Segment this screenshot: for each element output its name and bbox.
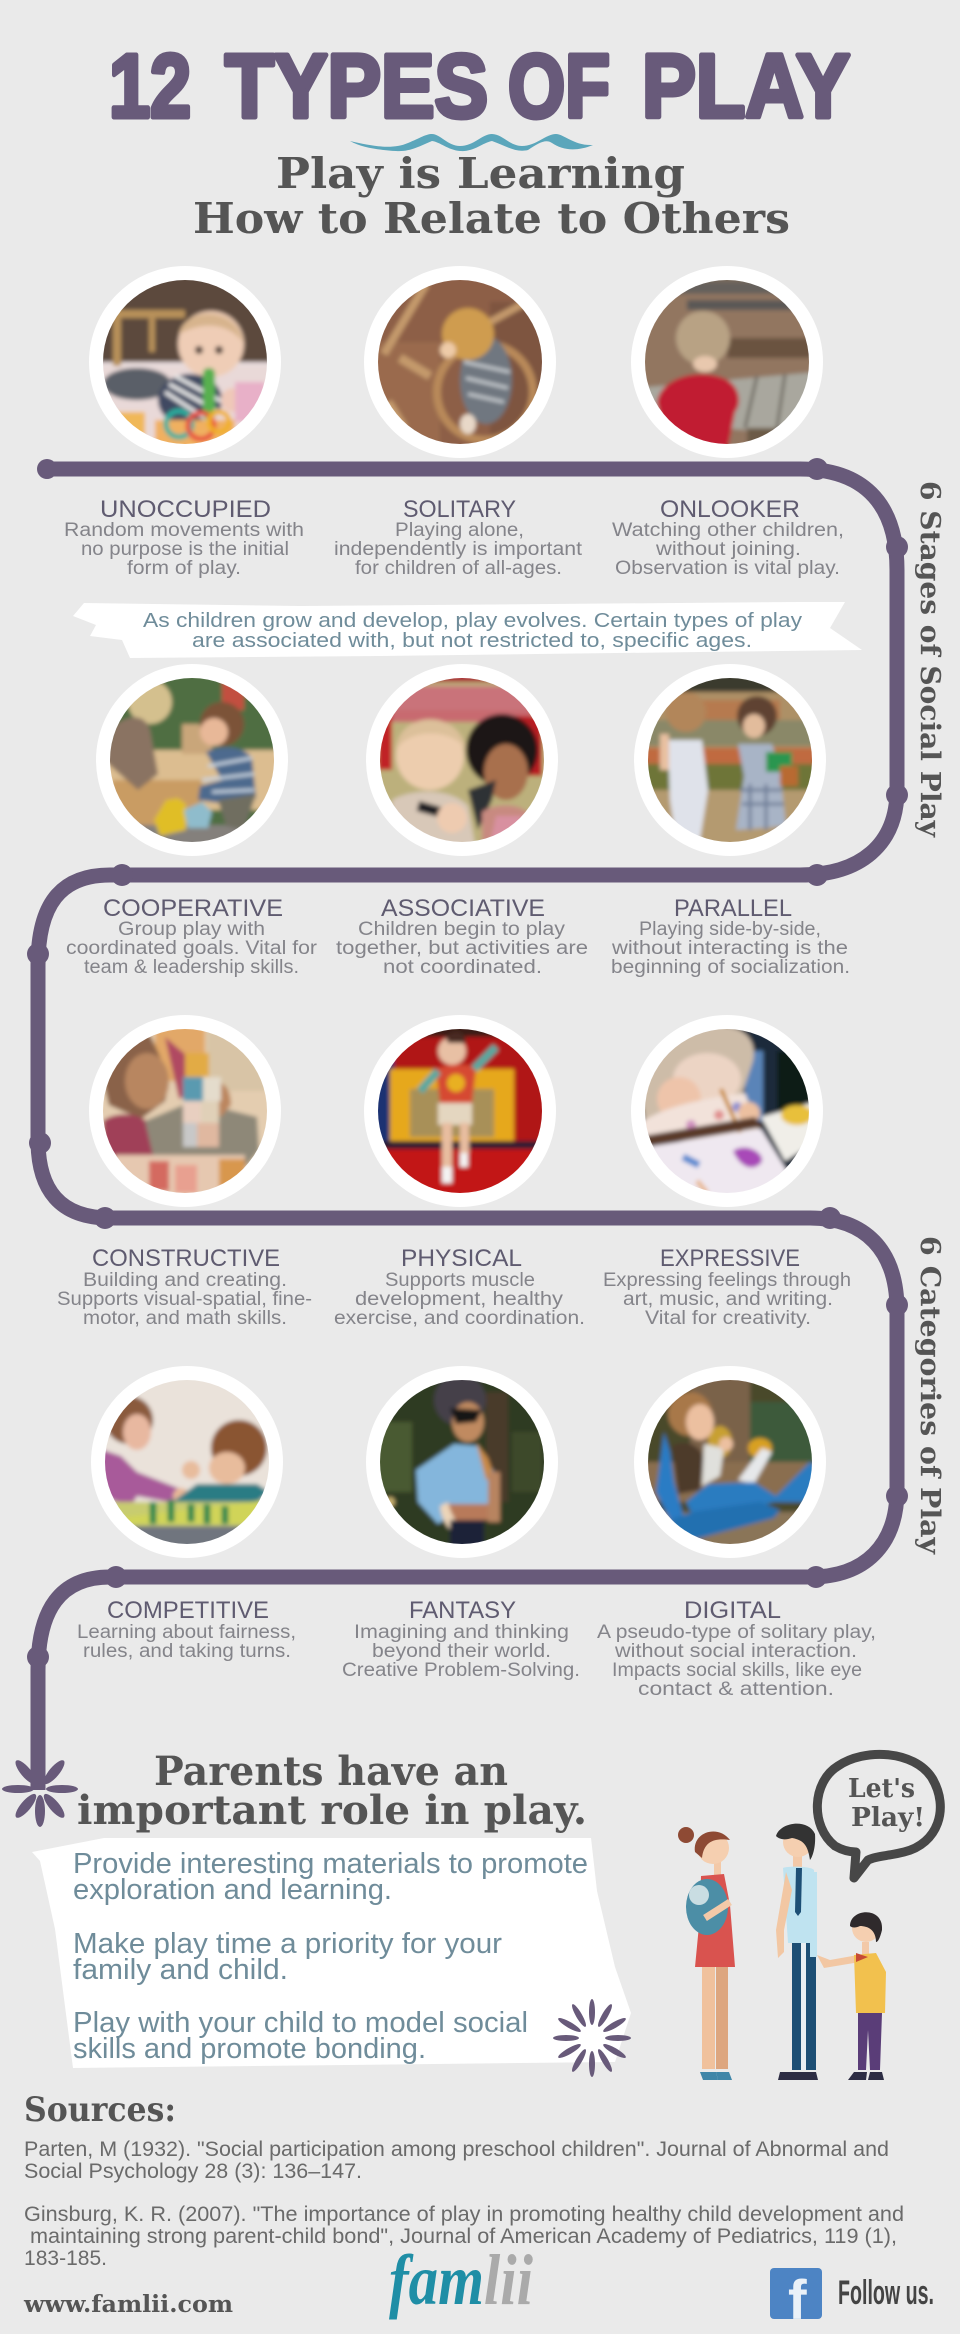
- illustration: family: [678, 1824, 886, 2080]
- heading: CONSTRUCTIVE: [92, 1245, 280, 1272]
- text: references: Ginsburg, K. R. (2007). "The importance of play in promoting healthy child development and: [24, 2203, 904, 2226]
- panel: unoccupied: [64, 266, 304, 579]
- panel: physical: [334, 1015, 585, 1329]
- callout: age note banner: [73, 602, 862, 658]
- description: without interacting is the: [611, 938, 848, 959]
- heading: ASSOCIATIVE: [381, 895, 545, 922]
- description: coordinated goals. Vital for: [66, 938, 318, 959]
- text: references: [24, 2138, 904, 2270]
- description: [64, 520, 304, 579]
- heading: PARALLEL: [674, 895, 792, 922]
- heading: DIGITAL: [684, 1597, 781, 1624]
- description: Group play with: [118, 919, 265, 940]
- description: beyond their world.: [372, 1641, 551, 1662]
- description: form of play.: [127, 558, 241, 579]
- heading: parents: important role in play.: [77, 1787, 587, 1834]
- heading: COMPETITIVE: [107, 1597, 269, 1624]
- panel: constructive: [57, 1015, 312, 1329]
- description: Imagining and thinking: [354, 1622, 569, 1643]
- description: [603, 1270, 851, 1329]
- callout: age note banner: As children grow and develop, play evolves. Certain types of play: [143, 610, 802, 632]
- description: art, music, and writing.: [623, 1289, 833, 1310]
- speech bubble: Let's: [848, 1774, 915, 1804]
- icon: large flower at end of path: [2, 1751, 78, 1827]
- heading: EXPRESSIVE: [660, 1245, 800, 1272]
- photo: two toddlers side by side: [634, 664, 826, 856]
- heading: FANTASY: [409, 1597, 516, 1624]
- description: Children begin to play: [358, 919, 566, 940]
- photo: child dressed as a pirate: [366, 1366, 558, 1558]
- photo: two boys with toy castle: [96, 664, 288, 856]
- heading: PHYSICAL: [401, 1245, 522, 1272]
- title: PLAY: [642, 37, 850, 137]
- description: beginning of socialization.: [611, 957, 850, 978]
- panel: onlooker: [612, 266, 844, 579]
- description: Learning about fairness,: [77, 1622, 296, 1643]
- description: Creative Problem-Solving.: [342, 1660, 580, 1681]
- description: Random movements with: [64, 520, 304, 541]
- heading: COOPERATIVE: [103, 895, 283, 922]
- panel: parent tips: Provide interesting materials to promote: [73, 1848, 588, 1880]
- subtitle: Play is Learning: [276, 149, 685, 198]
- description: [612, 520, 844, 579]
- figure: mother with baby: [678, 1827, 735, 2080]
- description: [334, 1270, 585, 1329]
- description: Building and creating.: [83, 1270, 287, 1291]
- subtitle: [193, 149, 790, 243]
- speech bubble: Play!: [851, 1803, 925, 1833]
- text: references: Social Psychology 28 (3): 136–147.: [24, 2160, 362, 2183]
- text: references: maintaining strong parent-child bond", Journal of American Academy of Pediatrics, 119 (1),: [30, 2225, 897, 2248]
- photo: child painting: [631, 1015, 823, 1207]
- description: Playing side-by-side,: [639, 919, 821, 940]
- panel: parent tips: Play with your child to model social: [73, 2007, 528, 2039]
- title: OF: [508, 37, 610, 137]
- title: [109, 37, 850, 137]
- panel: associative: [336, 664, 588, 978]
- title: TYPES: [225, 37, 488, 137]
- panel: parent tips: exploration and learning.: [73, 1874, 392, 1906]
- callout: age note banner: are associated with, but not restricted to, specific ages.: [192, 630, 752, 652]
- photo: child watching from behind: [631, 266, 823, 458]
- description: without joining.: [655, 539, 801, 560]
- photo: child with wooden train track: [364, 266, 556, 458]
- panel: competitive: [77, 1366, 296, 1662]
- photo: child stacking alphabet blocks: [89, 1015, 281, 1207]
- description: A pseudo-type of solitary play,: [597, 1622, 876, 1643]
- photo: two children in a toy car: [366, 664, 558, 856]
- photo: children playing a board game: [91, 1366, 283, 1558]
- heading: SOLITARY: [403, 496, 516, 523]
- side label: stages: 6 Stages of Social Play: [914, 481, 945, 838]
- panel: parallel: [611, 664, 850, 978]
- description: [597, 1622, 876, 1700]
- panel: solitary: [334, 266, 583, 579]
- description: rules, and taking turns.: [83, 1641, 291, 1662]
- description: Watching other children,: [612, 520, 844, 541]
- description: Expressing feelings through: [603, 1270, 851, 1291]
- description: [57, 1270, 312, 1329]
- description: development, healthy: [355, 1289, 564, 1310]
- panel: parent tips: family and child.: [73, 1954, 288, 1986]
- description: [342, 1622, 580, 1681]
- panel: parent tips: Make play time a priority for your: [73, 1928, 502, 1960]
- icon: facebook: f: [788, 2268, 807, 2331]
- figure: child: [817, 1912, 886, 2080]
- panel: fantasy: [342, 1366, 580, 1681]
- panel: digital: [597, 1366, 876, 1700]
- description: together, but activities are: [336, 938, 588, 959]
- panel: expressive: [603, 1015, 851, 1329]
- photo: child using a tablet: [634, 1366, 826, 1558]
- description: [336, 919, 588, 978]
- photo: baby with toy: [89, 266, 281, 458]
- heading: parents: [77, 1748, 587, 1834]
- description: Vital for creativity.: [645, 1308, 811, 1329]
- heading: sources: Sources:: [24, 2090, 176, 2130]
- description: Playing alone,: [395, 520, 524, 541]
- heading: ONLOOKER: [660, 496, 800, 523]
- logo: famlii: famlii: [389, 2240, 533, 2320]
- description: motor, and math skills.: [83, 1308, 287, 1329]
- winding timeline path: [27, 458, 908, 1790]
- description: [611, 919, 850, 978]
- wave decoration: [350, 134, 593, 151]
- description: Impacts social skills, like eye: [612, 1660, 862, 1681]
- description: without social interaction.: [614, 1641, 857, 1662]
- description: contact & attention.: [638, 1679, 834, 1700]
- description: Supports muscle: [385, 1270, 535, 1291]
- description: [334, 520, 583, 579]
- description: independently is important: [334, 539, 583, 560]
- subtitle: How to Relate to Others: [193, 194, 790, 243]
- photo: child jumping in bouncy castle: [364, 1015, 556, 1209]
- title: 12: [109, 37, 191, 137]
- panel: cooperative: [66, 664, 318, 978]
- text: references: Parten, M (1932). "Social participation among preschool children". Journal of Abnormal and: [24, 2138, 889, 2161]
- panel: parent tips: [32, 1838, 631, 2068]
- description: Observation is vital play.: [615, 558, 840, 579]
- icon: facebook: [770, 2268, 822, 2331]
- heading: parents: Parents have an: [154, 1748, 508, 1795]
- description: team & leadership skills.: [84, 957, 299, 978]
- description: no purpose is the initial: [81, 539, 289, 560]
- speech bubble: [817, 1754, 940, 1878]
- icon: small burst flower: [553, 1999, 631, 2077]
- figure: father: [776, 1824, 818, 2080]
- description: not coordinated.: [383, 957, 542, 978]
- description: Supports visual-spatial, fine-: [57, 1289, 312, 1310]
- website url: www.famlii.com: [23, 2291, 233, 2318]
- description: exercise, and coordination.: [334, 1308, 585, 1329]
- description: for children of all-ages.: [355, 558, 562, 579]
- text: references: 183-185.: [24, 2247, 107, 2270]
- description: [77, 1622, 296, 1662]
- heading: UNOCCUPIED: [100, 496, 271, 523]
- panel: parent tips: skills and promote bonding.: [73, 2033, 426, 2065]
- side label: categories: 6 Categories of Play: [914, 1236, 945, 1555]
- description: [66, 919, 318, 978]
